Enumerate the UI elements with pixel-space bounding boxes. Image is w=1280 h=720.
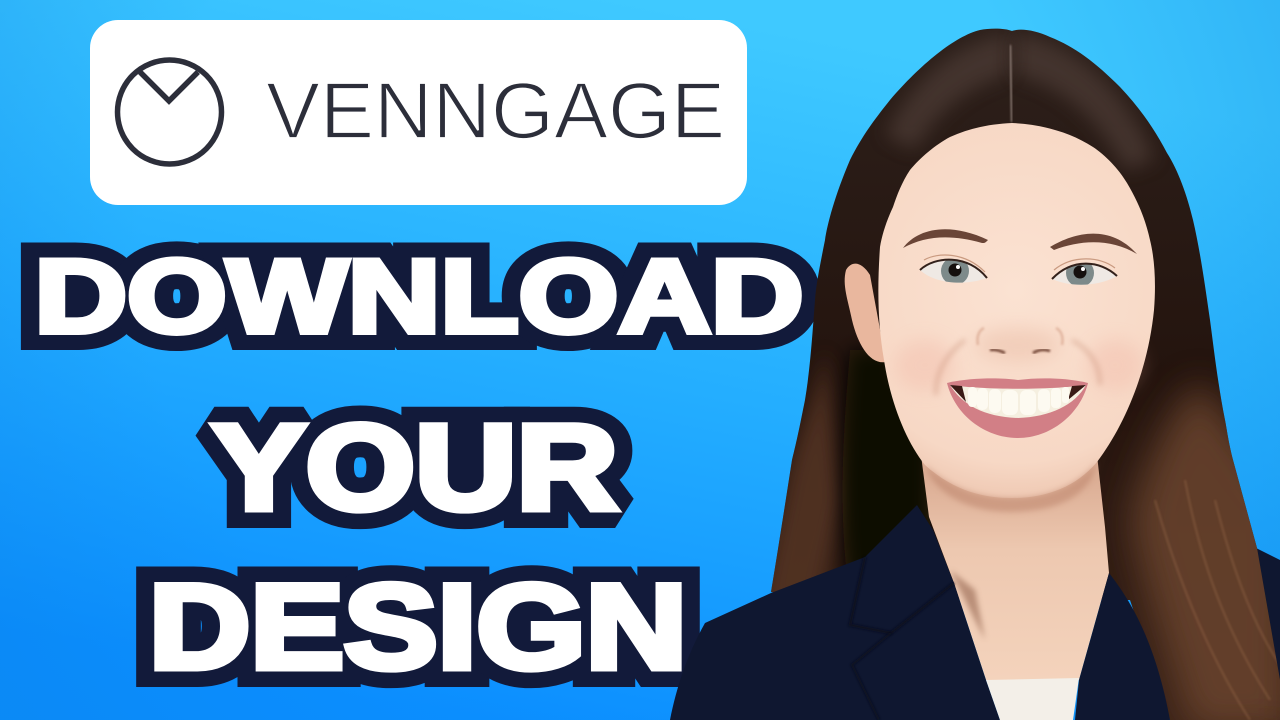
chin shadow (925, 462, 1097, 512)
far right jacket shoulder (1240, 545, 1280, 720)
lapel notch (852, 633, 891, 720)
jacket right (1075, 573, 1170, 720)
heading: YOUR: YOUR (212, 399, 618, 535)
jacket left (670, 505, 1000, 720)
eye left (920, 255, 987, 285)
woman portrait (670, 29, 1280, 720)
eyebrow right (1050, 234, 1137, 254)
heading: YOUR: YOUR (212, 399, 618, 535)
heading: DOWNLOAD: DOWNLOAD (34, 239, 804, 355)
logo wordmark: VENNGAGE (266, 66, 725, 155)
mouth (947, 378, 1088, 438)
shirt (986, 678, 1079, 720)
heading: DOWNLOAD: DOWNLOAD (34, 239, 804, 355)
icon: venngage logo (118, 60, 222, 164)
eyebrow left (903, 229, 988, 248)
ear (845, 264, 886, 362)
teeth (968, 387, 1069, 415)
hair (760, 29, 1280, 720)
lapel shadow (850, 557, 954, 633)
eye right (1052, 259, 1117, 287)
neck (921, 455, 1109, 680)
logo card (90, 20, 747, 205)
heading: DESIGN: DESIGN (149, 560, 687, 694)
cheeks and smile folds (895, 339, 1143, 395)
heading: DESIGN: DESIGN (149, 560, 687, 694)
nose (976, 260, 1063, 362)
neck shadow (950, 570, 985, 640)
face (878, 123, 1155, 498)
hair parting (1010, 45, 1012, 122)
